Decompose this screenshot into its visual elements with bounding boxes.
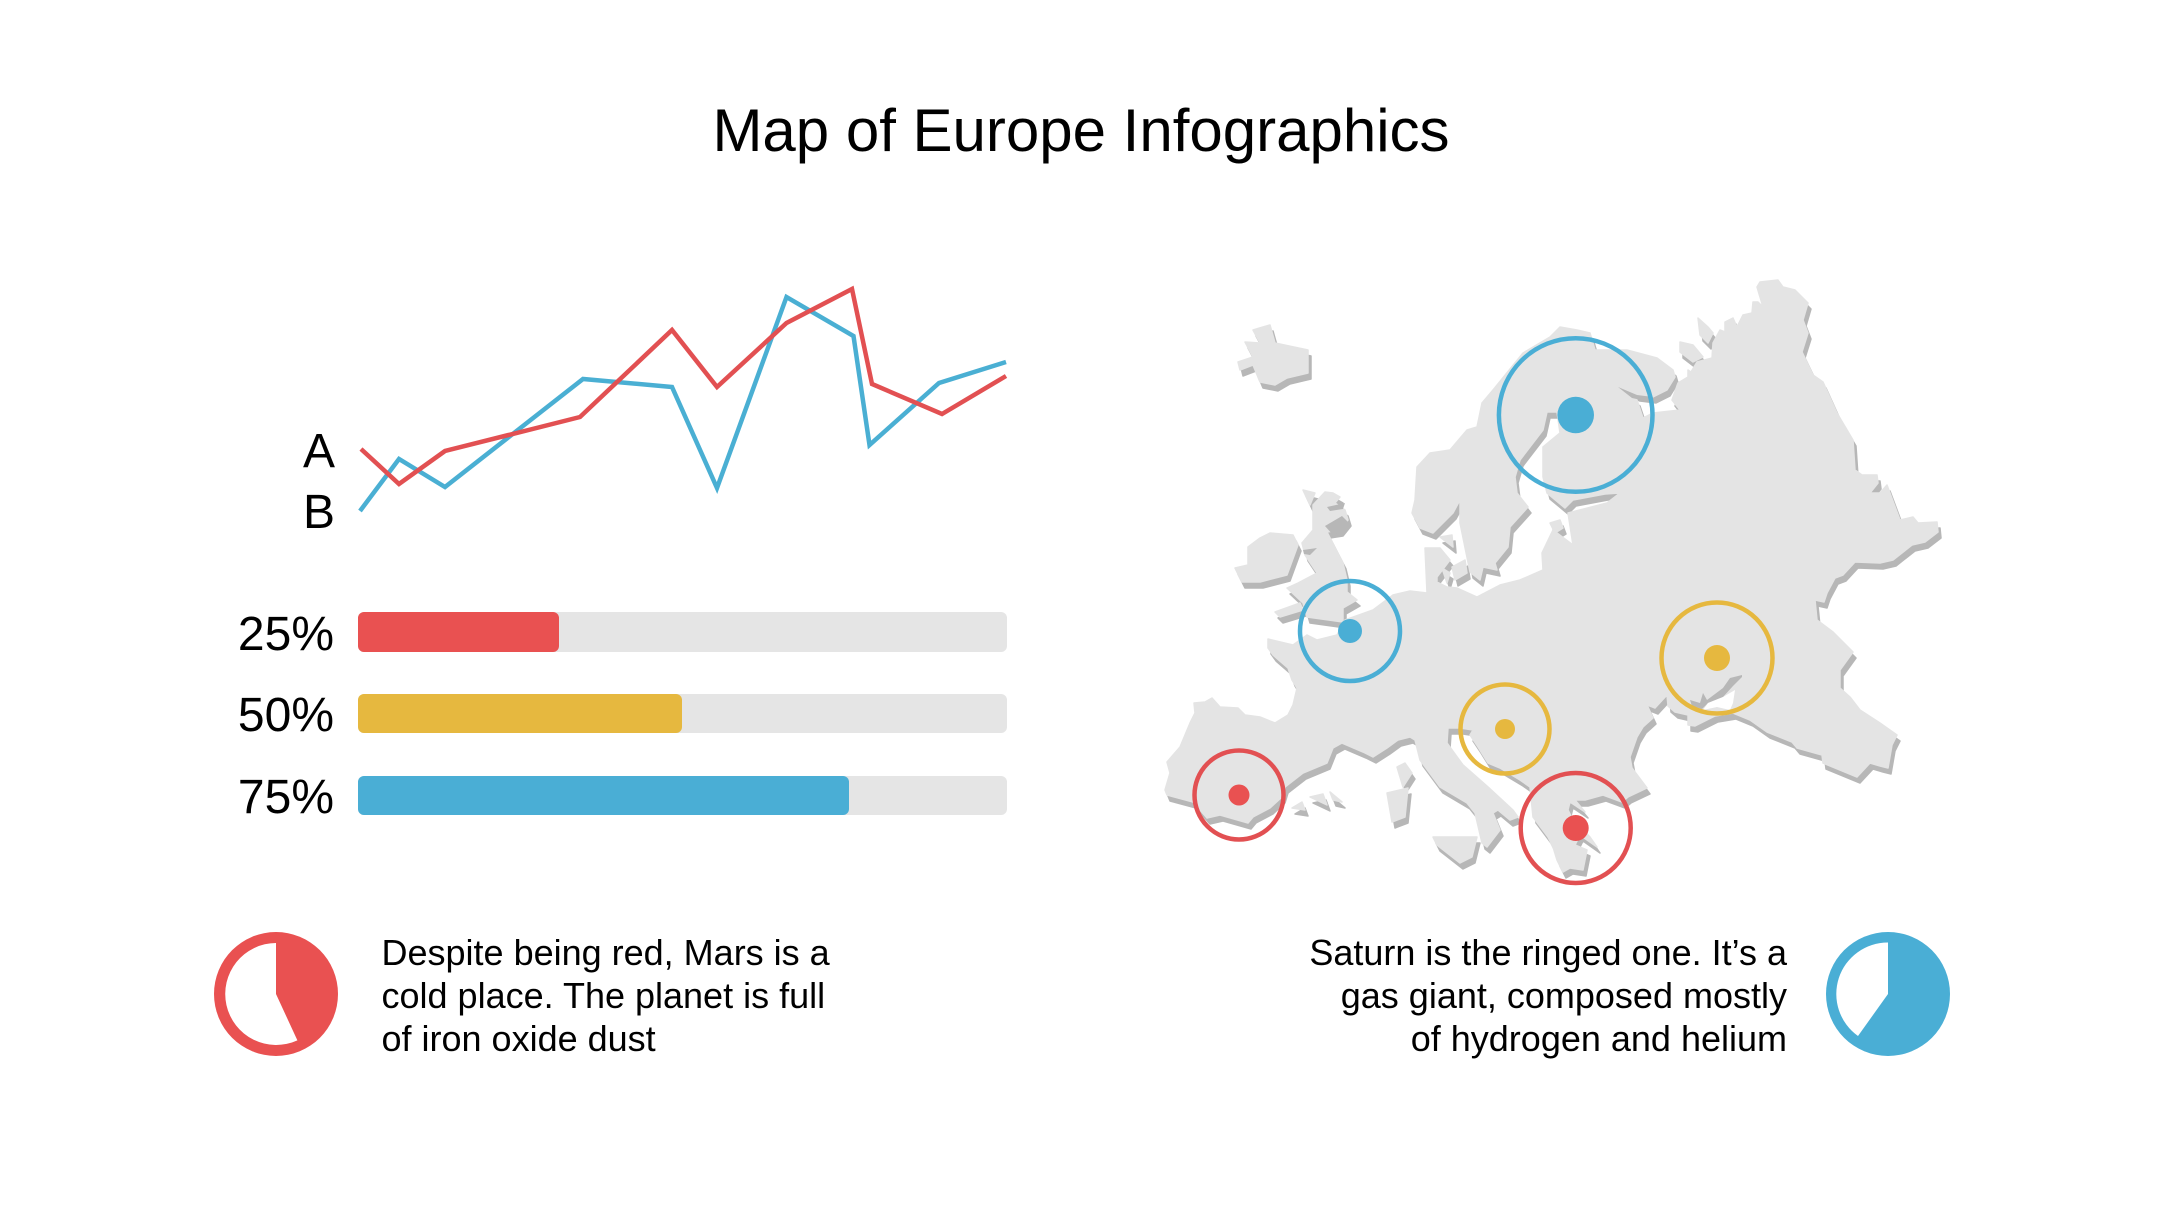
marker: northern blue: [1499, 338, 1652, 492]
pie icon: blue: [1826, 932, 1950, 1056]
line: series B blue: [360, 297, 1006, 511]
pie icon: red: [214, 932, 338, 1056]
series label A: A: [303, 425, 335, 478]
panel: map of Europe: [1165, 280, 1941, 883]
text: Saturn: of hydrogen and helium: [1411, 1018, 1787, 1059]
text: Mars: Despite being red, Mars is a: [382, 932, 831, 973]
text: Saturn: gas giant, composed mostly: [1341, 975, 1787, 1016]
bar 50%: [238, 689, 1007, 742]
panel: Saturn note: [1309, 932, 1950, 1059]
map landmass: [1165, 280, 1941, 878]
text: Mars: of iron oxide dust: [382, 1018, 656, 1059]
title: Map of Europe Infographics: [712, 97, 1450, 164]
text: Mars: cold place. The planet is full: [382, 975, 825, 1016]
series label B: B: [303, 486, 335, 539]
panel: line chart: [303, 289, 1006, 539]
marker: eastern yellow: [1662, 602, 1772, 714]
marker: greek red: [1521, 773, 1631, 883]
panel: Mars note: [214, 932, 831, 1059]
bar 75%: 75%: [238, 771, 334, 824]
line: series A red: [361, 289, 1006, 484]
bar 50%: 50%: [238, 689, 334, 742]
bar 75%: [238, 771, 1007, 824]
bar 25%: 25%: [238, 608, 334, 661]
text: Saturn: Saturn is the ringed one. It’s a: [1309, 932, 1788, 973]
marker: central yellow: [1460, 684, 1550, 774]
bar 25%: [238, 608, 1007, 661]
panel: progress bars: [238, 608, 1007, 824]
marker: iberian red: [1194, 750, 1284, 840]
marker: western blue: [1300, 581, 1400, 681]
